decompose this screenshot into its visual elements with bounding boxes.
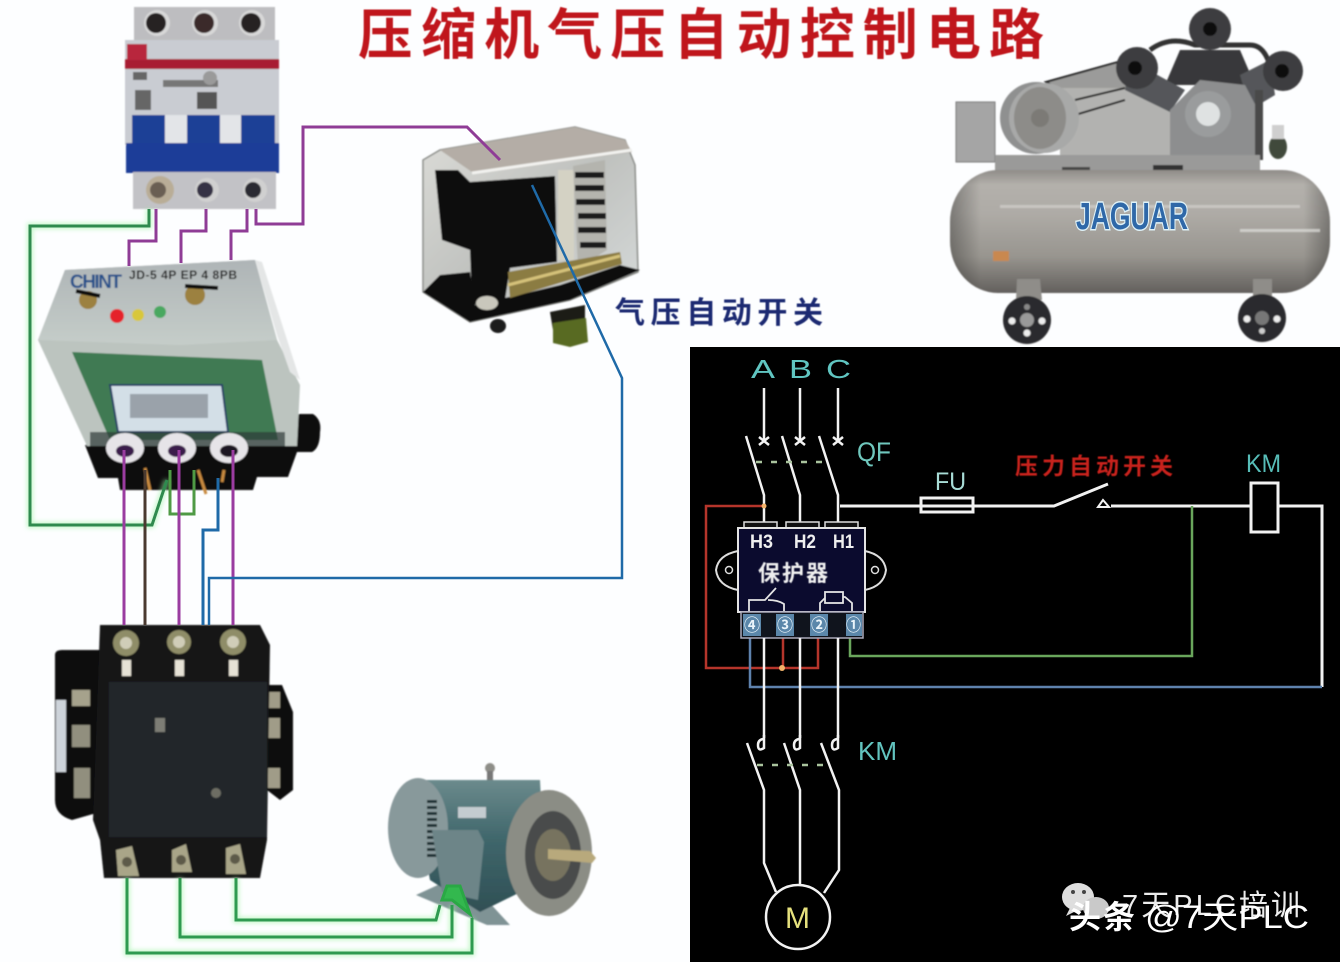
label: KM contacts: KM xyxy=(858,736,897,766)
schematic: protector block: ② xyxy=(811,616,827,635)
wiring: breaker to protector and pressure switch xyxy=(129,127,500,266)
schematic: motor symbol: M xyxy=(785,902,810,935)
wire glow: green xyxy=(30,209,472,953)
schematic: junction dots xyxy=(762,504,785,671)
icon: compressor protector: JD-5 4P EP 4 8PB xyxy=(129,268,237,282)
watermark: platform handle: @7天PLC xyxy=(1145,899,1309,935)
label: A B C phases: A xyxy=(751,354,776,384)
icon: electric motor xyxy=(388,763,596,925)
schematic: red wiring xyxy=(706,506,818,668)
icon: circuit breaker QF xyxy=(125,7,279,209)
schematic: protector block: ① xyxy=(846,616,861,635)
schematic: green wiring xyxy=(850,506,1192,656)
icon: compressor protector: CHINT xyxy=(70,272,122,293)
schematic: breaker poles xyxy=(746,388,843,523)
schematic: blue wiring xyxy=(750,638,1322,687)
watermark: account name: 7天PLC培训 xyxy=(1122,889,1300,922)
wiring: blue wire to pressure switch xyxy=(209,185,622,625)
label: JAGUAR brand: JAGUAR xyxy=(1076,196,1188,238)
schematic: protector block: ③ xyxy=(777,616,793,635)
schematic: contactor linkage xyxy=(757,764,830,766)
schematic: contactor poles xyxy=(747,735,839,893)
label: A B C phases xyxy=(751,354,851,384)
watermark: platform handle: 头条 xyxy=(1069,899,1135,935)
schematic: protector block: 保护器 xyxy=(758,556,828,588)
icon: pressure switch xyxy=(423,127,640,347)
schematic: protector block: H2 xyxy=(794,532,816,553)
icon: WeChat watermark xyxy=(1062,883,1109,919)
schematic: breaker linkage xyxy=(756,461,827,463)
wiring: contactor to motor xyxy=(127,878,472,953)
watermark: platform handle xyxy=(1069,899,1309,935)
label: pressure auto switch: 压力自动开关 xyxy=(1015,447,1173,481)
schematic: protector block: H1 xyxy=(833,532,854,553)
label: A B C phases: B xyxy=(789,354,812,384)
icon: air compressor xyxy=(950,8,1330,344)
wiring: green control wire xyxy=(30,209,194,525)
panel: circuit schematic xyxy=(690,347,1340,962)
schematic: protector block: H3 xyxy=(750,532,773,553)
label: FU: FU xyxy=(935,468,966,496)
label: A B C phases: C xyxy=(826,354,851,384)
label: QF: QF xyxy=(857,437,891,467)
schematic: power lines to contactor xyxy=(764,638,838,738)
wiring: protector to contactor xyxy=(124,450,233,625)
schematic: control line with fuse and switch xyxy=(840,483,1322,687)
icon: compressor protector xyxy=(38,260,320,494)
label: KM coil: KM xyxy=(1246,450,1281,478)
schematic: protector block: ④ xyxy=(744,616,760,635)
schematic: protector block xyxy=(716,522,886,638)
label: pressure switch caption: 气压自动开关 xyxy=(615,288,823,332)
icon: AC contactor xyxy=(55,625,293,878)
schematic: motor symbol xyxy=(766,885,830,949)
